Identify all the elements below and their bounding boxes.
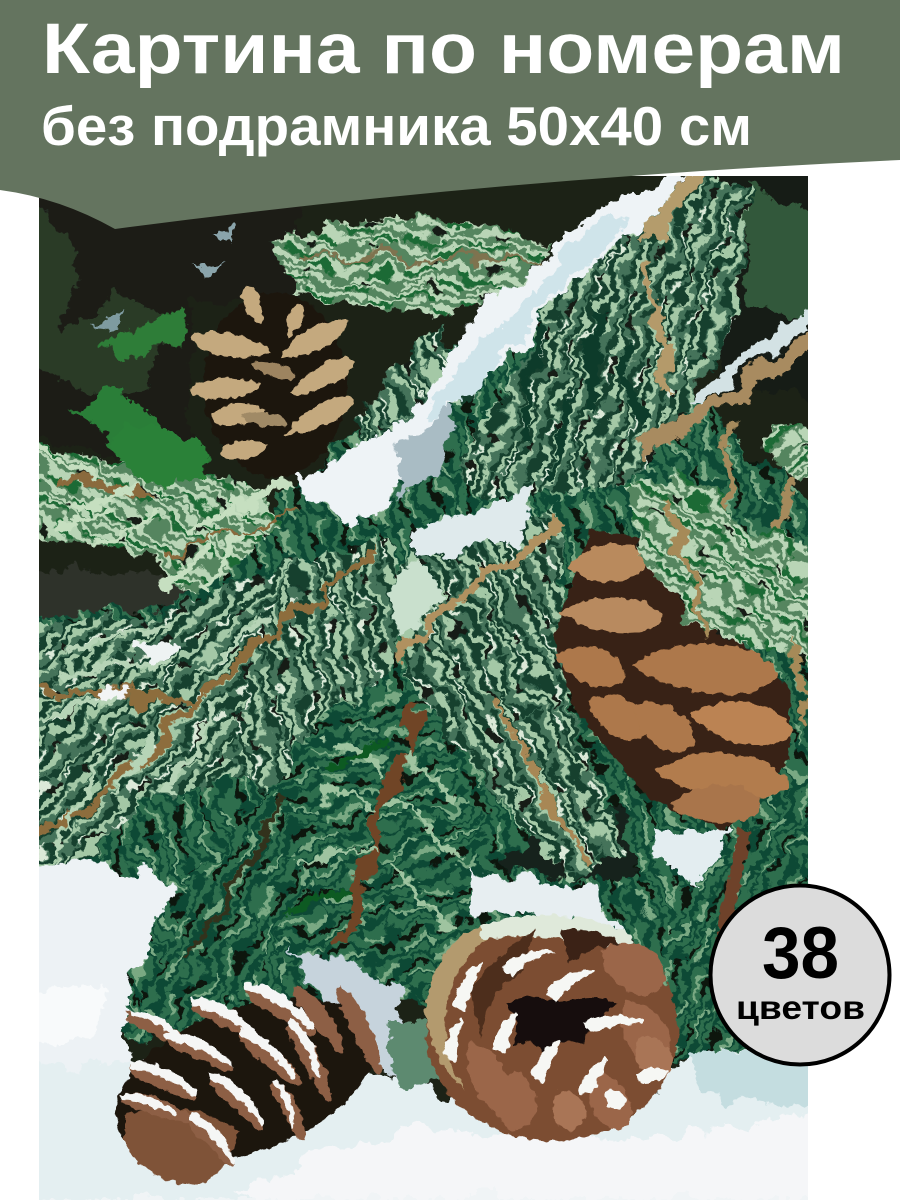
lower cones layer [94,915,681,1194]
snow underlay at painting bottom [42,1186,808,1200]
cone: upper left [189,283,359,477]
cones layer [189,283,796,940]
cone stem [722,830,745,940]
header banner [0,0,900,229]
lower centre dark needles [130,690,640,1040]
foliage over right cone [625,470,830,720]
lower right foliage [661,778,808,1064]
upper right needles [350,180,750,500]
badge: 38 colours [710,886,890,1064]
main snow on branch [295,170,708,555]
cone: bottom centre [425,915,681,1141]
title line 1: Картина по номерам [42,10,845,89]
snow ground [0,830,850,1200]
centre branch needles [385,510,625,880]
left branch needles [20,430,300,600]
painting: snowy pine branches [39,176,808,1200]
title line 2: без подрамника 50х40 см [41,95,752,157]
cone: right large [550,530,796,830]
top centre branch [270,218,555,318]
cone: bottom left [114,982,383,1186]
right snowy twig [634,308,808,529]
badge number: 38 [762,913,839,994]
upper-right small foliage [760,423,808,482]
central left needle mass [39,536,400,866]
painting background [39,176,808,1103]
foliage underlay [39,302,808,1046]
foliage and snow layer [39,176,808,1200]
badge label: цветов [736,989,865,1026]
